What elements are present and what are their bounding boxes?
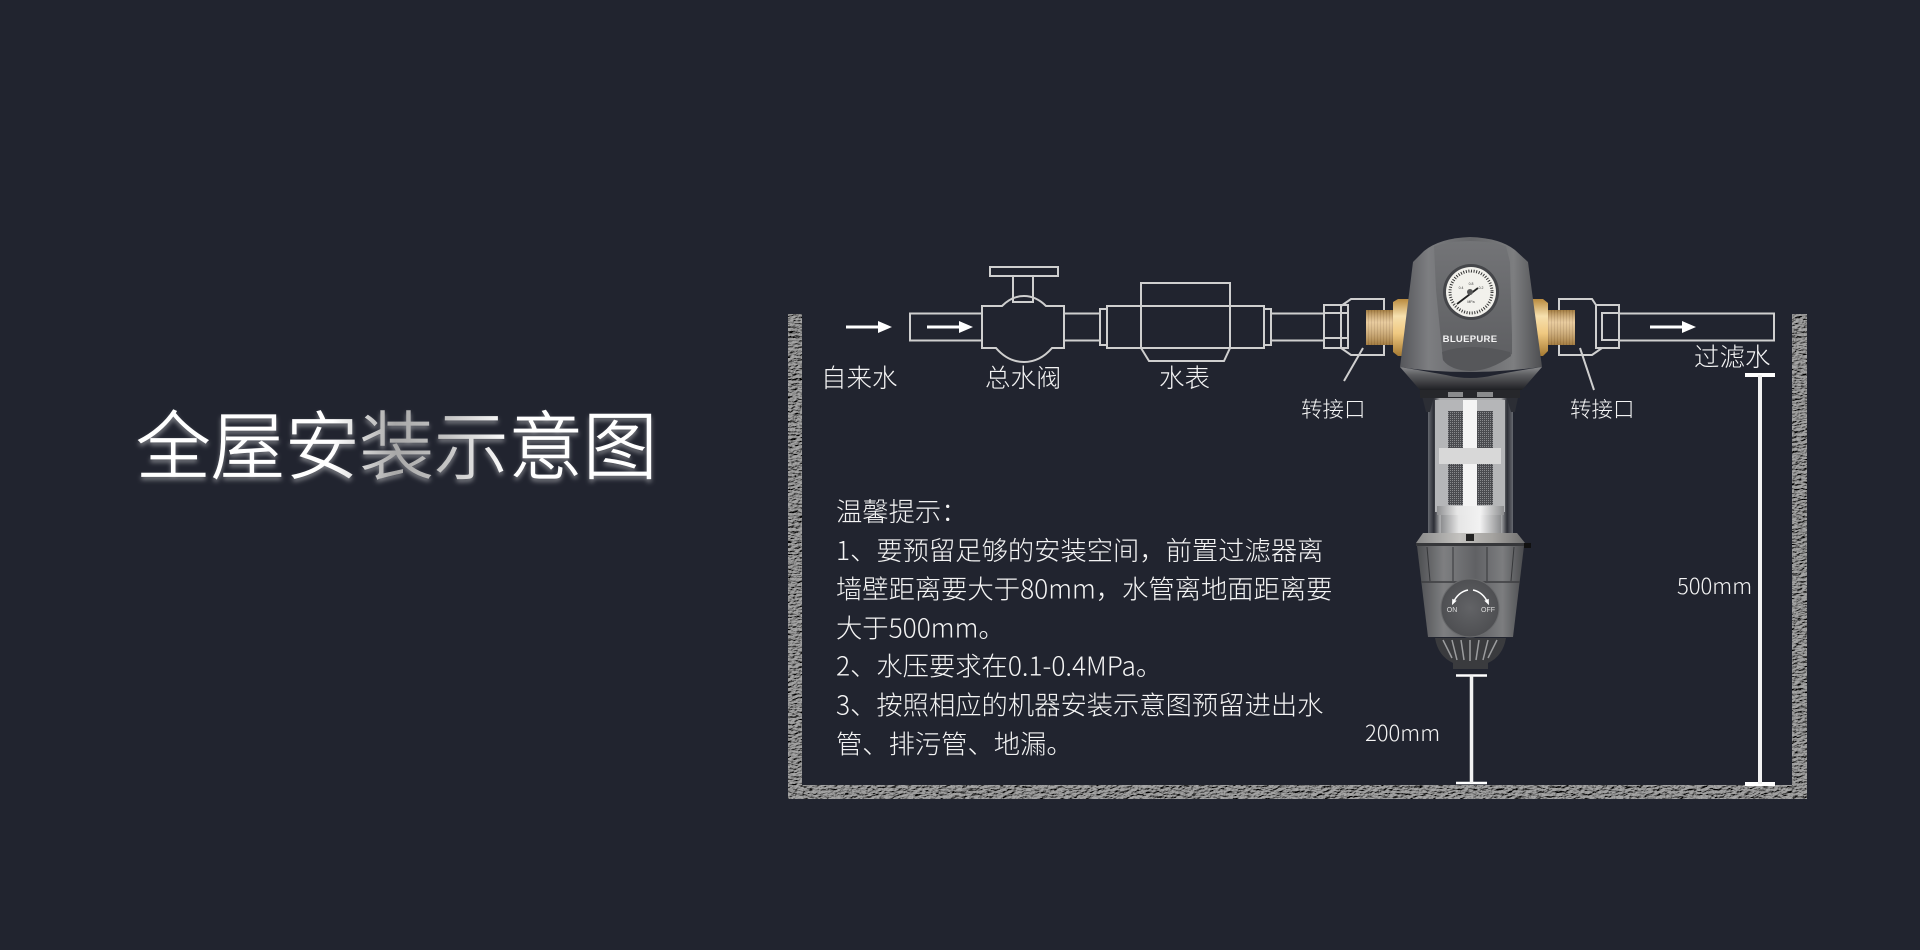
label: left adapter: 转接口 [1301, 393, 1366, 424]
room walls and floor [788, 314, 1807, 799]
tips text block: 1、要预留足够的安装空间，前置过滤器离 [836, 529, 1323, 568]
pressure gauge: 0.8 [1469, 282, 1473, 286]
label: tap water: 自来水 [821, 358, 898, 395]
tips text block: 管、排污管、地漏。 [836, 722, 1073, 762]
label: water meter: 水表 [1159, 358, 1210, 395]
label: right adapter: 转接口 [1570, 393, 1635, 424]
dimension: 200mm [1365, 675, 1487, 783]
label: filtered water: 过滤水 [1694, 337, 1771, 374]
pressure gauge: MPa [1467, 300, 1475, 304]
title: 全屋安装示意图 [136, 388, 658, 495]
bottom drain [1435, 638, 1506, 669]
front panel [1434, 241, 1512, 370]
knob: ON [1447, 607, 1457, 614]
dimension: 500mm: 500mm [1677, 569, 1752, 601]
filter cup [1416, 533, 1531, 669]
dimension: 500mm [1677, 375, 1775, 784]
brass fittings [1366, 299, 1575, 356]
pressure gauge: 0.4 [1459, 286, 1463, 290]
label: main valve: 总水阀 [985, 358, 1062, 395]
arrow: incoming water [846, 321, 892, 333]
tips text block: 温馨提示： [836, 490, 967, 529]
knob [1441, 579, 1499, 637]
tips text block: 墙壁距离要大于80mm，水管离地面距离要 [836, 568, 1332, 606]
brand name: BLUEPURE [1443, 334, 1497, 345]
pressure gauge: 0.2 [1479, 286, 1483, 290]
filter column [1420, 388, 1520, 534]
arrow: inlet flow [927, 321, 973, 333]
tips text block [836, 490, 1332, 762]
water meter outline [1064, 283, 1324, 361]
knob: OFF [1481, 607, 1495, 614]
right adapter and outlet pipe outline [1559, 299, 1774, 390]
pressure gauge [1443, 264, 1499, 320]
inlet pipe [910, 314, 982, 340]
left adapter outline [1324, 299, 1384, 381]
arrow: outlet flow [1650, 321, 1696, 333]
tips text block: 3、按照相应的机器安装示意图预留进出水 [836, 684, 1323, 722]
filter head [1400, 237, 1542, 390]
tips text block: 大于500mm。 [836, 606, 1005, 646]
main valve outline [982, 267, 1064, 362]
dimension: 200mm: 200mm [1365, 716, 1440, 748]
tips text block: 2、水压要求在0.1-0.4MPa。 [836, 644, 1162, 684]
